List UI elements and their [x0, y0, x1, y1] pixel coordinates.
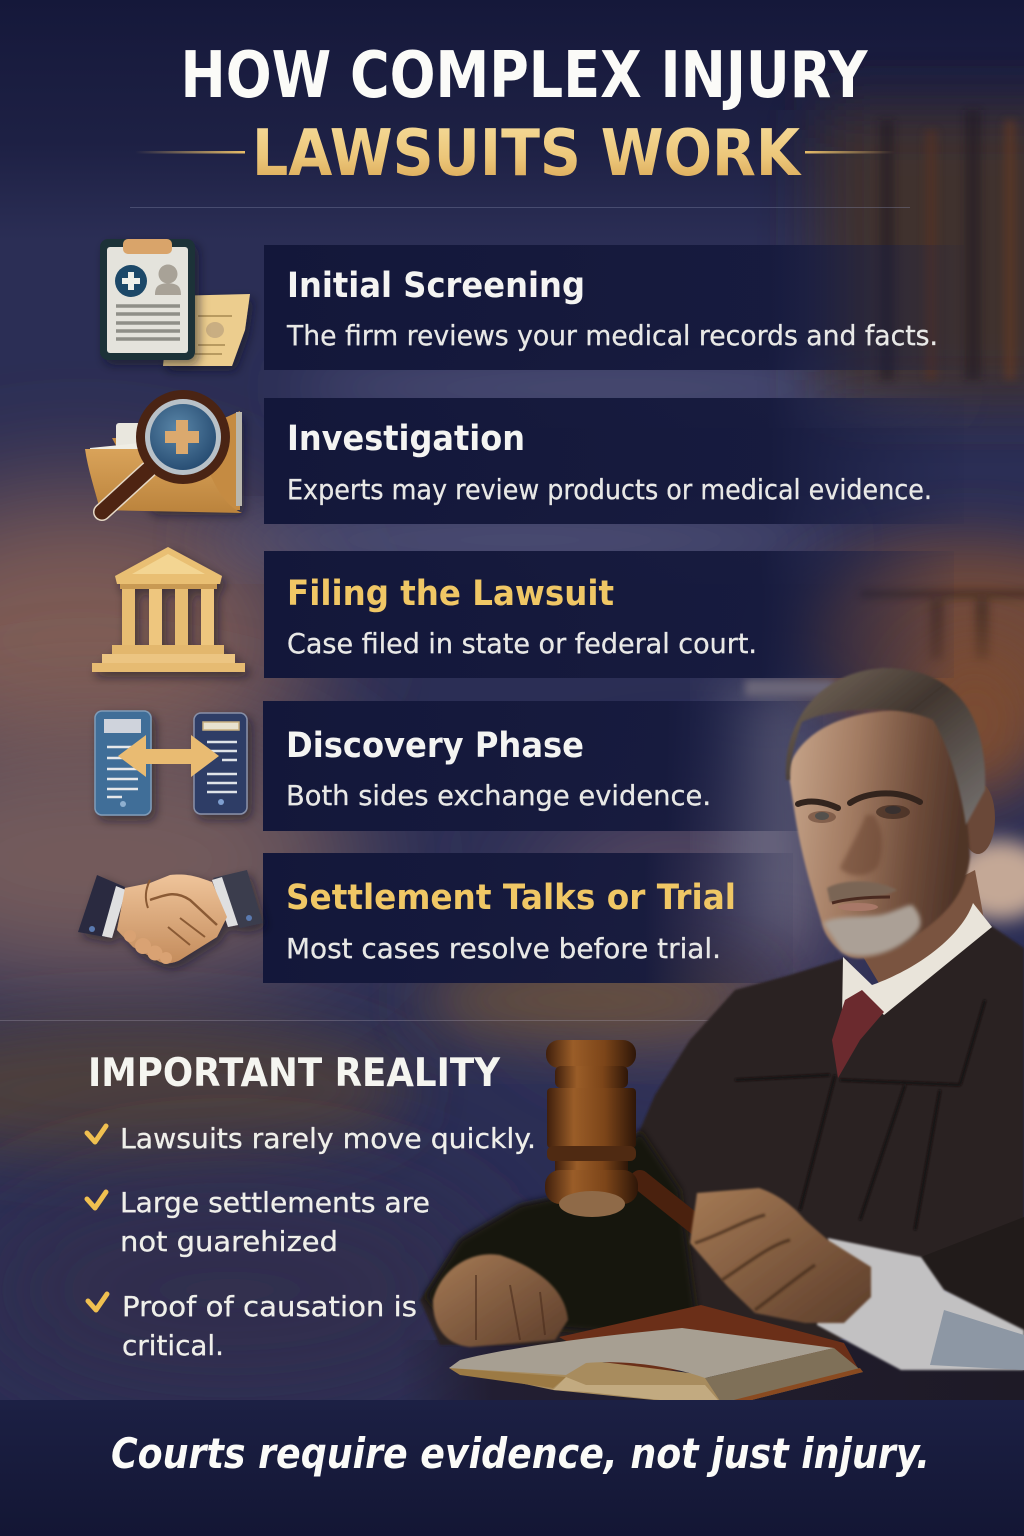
title: HOW COMPLEX INJURY	[180, 39, 868, 113]
judge beard	[823, 905, 920, 956]
panel: step 3 filing the lawsuit	[264, 551, 954, 678]
judge right hand gripping gavel	[690, 1188, 871, 1323]
checklist item 2: not guarehized	[120, 1225, 338, 1258]
panel: step 4 discovery phase: Both sides exchange evidence.	[286, 779, 711, 812]
panel: step 5 settlement talks or trial: Most cases resolve before trial.	[286, 932, 721, 965]
judge left hand	[433, 1254, 568, 1347]
icon: exchanging documents arrow	[95, 711, 247, 815]
panel: step 4 discovery phase: Discovery Phase	[286, 726, 584, 766]
footer band	[0, 1400, 1024, 1536]
judge neck and collar	[850, 870, 985, 985]
checklist item 3: Proof of causation is	[122, 1290, 417, 1323]
checklist item 3	[88, 1290, 417, 1362]
judge figure	[420, 668, 1024, 1370]
judge head	[961, 782, 995, 854]
panel: important reality	[87, 1051, 536, 1362]
checklist item 1: Lawsuits rarely move quickly.	[120, 1122, 536, 1155]
icon: clipboard with medical record	[100, 239, 250, 366]
title: LAWSUITS WORK	[252, 117, 802, 191]
checklist item 2: Large settlements are	[120, 1186, 430, 1219]
panel: step 2 investigation: Experts may review products or medical evidence.	[287, 473, 932, 506]
panel: step 4 discovery phase	[263, 701, 823, 831]
courtroom table	[400, 1340, 1024, 1400]
panel: step 1 initial screening	[264, 245, 964, 370]
panel: step 3 filing the lawsuit: Case filed in state or federal court.	[287, 627, 757, 660]
checklist item 2	[87, 1186, 430, 1258]
panel: step 2 investigation	[264, 398, 964, 524]
icon: courthouse	[92, 547, 245, 672]
judge shirt cuff	[817, 1238, 1024, 1370]
panel: step 5 settlement talks or trial	[263, 853, 793, 983]
checklist item 3: critical.	[122, 1329, 224, 1362]
icon: handshake	[78, 870, 263, 964]
icon: folder with magnifying glass	[85, 390, 242, 513]
panel: important reality: IMPORTANT REALITY	[88, 1051, 501, 1096]
gavel	[545, 1040, 700, 1228]
law book	[449, 1305, 863, 1407]
panel: step 1 initial screening: Initial Screening	[287, 266, 585, 306]
panel: step 3 filing the lawsuit: Filing the Lawsuit	[287, 574, 614, 614]
judge tie	[832, 990, 884, 1078]
judge robe	[420, 925, 1024, 1345]
panel: step 2 investigation: Investigation	[287, 419, 525, 459]
panel: step 5 settlement talks or trial: Settlement Talks or Trial	[286, 878, 736, 918]
judge brows, eyes, nose	[798, 793, 920, 808]
title	[135, 39, 895, 191]
panel: step 1 initial screening: The firm reviews your medical records and facts.	[286, 319, 938, 352]
